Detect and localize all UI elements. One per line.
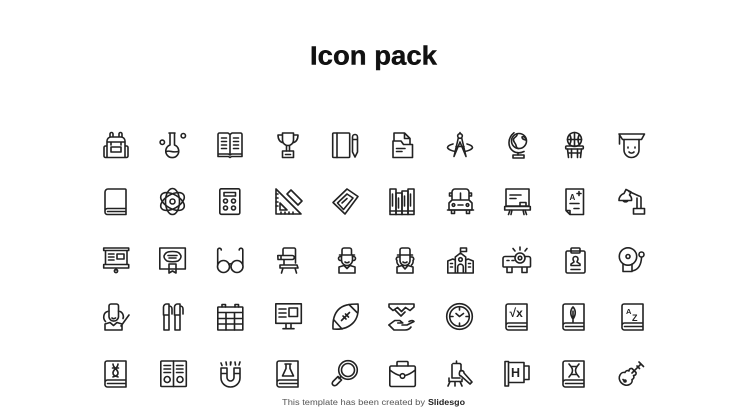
footer credit: This template has been created by (282, 398, 425, 407)
icon: math book (506, 304, 527, 330)
icon: diploma (160, 248, 185, 273)
icon: violin (619, 362, 644, 385)
icon: two pens (164, 304, 183, 330)
icon: drawing compass (448, 132, 472, 156)
icon: school desk chair (278, 248, 298, 273)
icon: backpack (104, 132, 128, 158)
icon: feather book (563, 304, 584, 330)
icon: open book (218, 133, 242, 158)
icon: school building (448, 248, 473, 273)
icon: id badge (566, 248, 585, 273)
icon: row of books (390, 189, 414, 214)
icon: flask (160, 133, 186, 158)
icon: painting easel (448, 361, 472, 386)
icon: document folder (393, 133, 412, 158)
icon: briefcase (390, 362, 415, 386)
footer credit (282, 398, 465, 407)
icon: set square and ruler (276, 189, 302, 214)
icon: boy student (338, 248, 356, 273)
icon: wall clock (447, 304, 472, 329)
icon: globe (509, 133, 526, 158)
icon: math book: √x (510, 306, 523, 320)
icon: monitor (276, 304, 301, 329)
icon: DNA book (105, 361, 126, 387)
icon: A to Z book: Z (632, 313, 638, 323)
icon: binders (161, 361, 186, 386)
icon: trophy (278, 133, 298, 158)
icon: graded paper: A (570, 193, 576, 202)
icon: atom flower (158, 188, 187, 214)
icon: notebook and pencil (333, 133, 358, 158)
icon: calculator (220, 189, 240, 214)
icon: school bell (619, 248, 644, 272)
icon: flask book (277, 361, 298, 387)
icon: desk lamp (619, 190, 644, 214)
icon: alchemy book (563, 361, 584, 387)
icon: closed book (105, 189, 126, 214)
icon: hand holding diamonds (389, 304, 414, 330)
icon: A to Z book (622, 304, 643, 330)
icon: hotel sign (505, 362, 529, 386)
icon: projection screen (104, 248, 129, 273)
icon: magnet (221, 362, 240, 387)
icon: teacher with pointer (104, 304, 129, 330)
title: Icon pack (310, 42, 438, 70)
icon: graduate (619, 134, 644, 158)
icon: pencil sharpener (333, 189, 358, 214)
icon: projector (503, 247, 530, 272)
icon: basketball hoop (566, 132, 583, 158)
icon: hotel sign: H (511, 366, 520, 380)
icon: graded paper (566, 189, 584, 214)
icon: glasses (218, 248, 243, 272)
icon: A to Z book: A (626, 307, 632, 316)
footer credit: Slidesgo (428, 398, 465, 407)
icon: calendar (218, 304, 243, 330)
icon: magnifying glass (332, 361, 357, 386)
icon: american football (333, 304, 358, 329)
icon: school bus (448, 189, 474, 214)
icon: classroom board (505, 189, 530, 214)
icon: girl student (396, 248, 414, 273)
